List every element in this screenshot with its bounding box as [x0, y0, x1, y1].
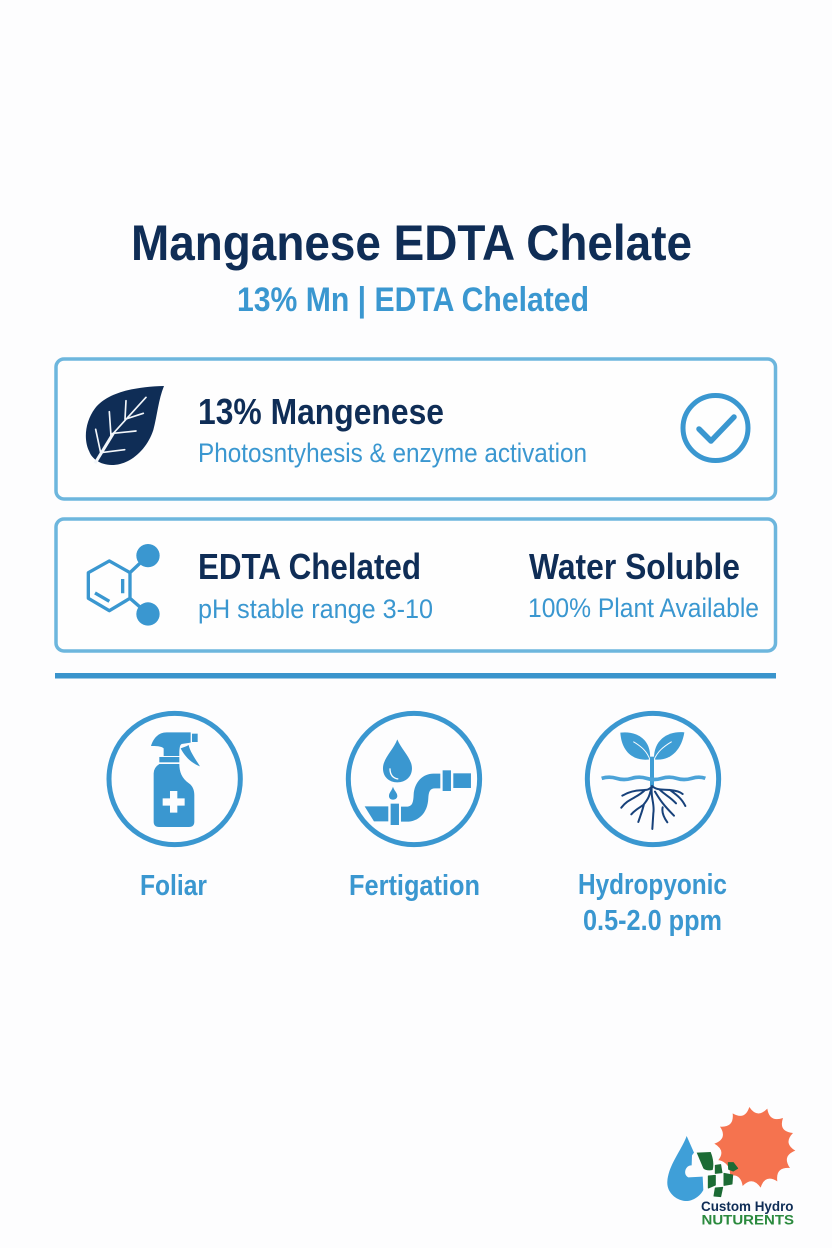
- application: hydroponic: [578, 713, 727, 937]
- heading: EDTA Chelated: EDTA Chelated: [198, 546, 421, 587]
- label: Hydropyonic rate: 0.5-2.0 ppm: [583, 905, 722, 937]
- panel frame: [56, 519, 776, 651]
- icon: water drop and pipe: [348, 713, 480, 845]
- application: fertigation: [348, 713, 480, 902]
- icon: spray bottle: [109, 713, 240, 845]
- logo text: Nuturents: NUTURENTS: [702, 1212, 794, 1228]
- label: Foliar: Foliar: [140, 870, 207, 902]
- text: plant availability: 100% Plant Available: [528, 593, 759, 623]
- icon: leaf: [86, 386, 164, 465]
- label: Hydropyonic rate: Hydropyonic: [578, 869, 727, 901]
- label: Fertigation: Fertigation: [349, 870, 480, 902]
- logo: Custom Hydro Nuturents: [667, 1107, 795, 1228]
- panel: chelation and solubility: [56, 519, 776, 651]
- icon: seedling with roots: [587, 713, 719, 845]
- subtitle: 13% Mn | EDTA Chelated: [237, 281, 589, 319]
- panel: manganese: [56, 359, 776, 499]
- heading: Water Soluble: Water Soluble: [529, 546, 740, 587]
- text: pH range: pH stable range 3-10: [198, 594, 433, 624]
- logo mark: [667, 1107, 795, 1201]
- text: photosynthesis note: Photosntyhesis & enzyme activation: [198, 438, 587, 468]
- heading: 13% Mangenese: 13% Mangenese: [198, 391, 444, 432]
- label: Hydropyonic rate: [578, 869, 727, 937]
- panel frame: [56, 359, 776, 499]
- title: Manganese EDTA Chelate: [131, 215, 692, 271]
- icon: check mark: [683, 396, 748, 460]
- icon: molecule: [88, 544, 160, 626]
- logo text: Custom Hydro: Custom Hydro: [701, 1199, 794, 1214]
- application: foliar: [109, 713, 240, 902]
